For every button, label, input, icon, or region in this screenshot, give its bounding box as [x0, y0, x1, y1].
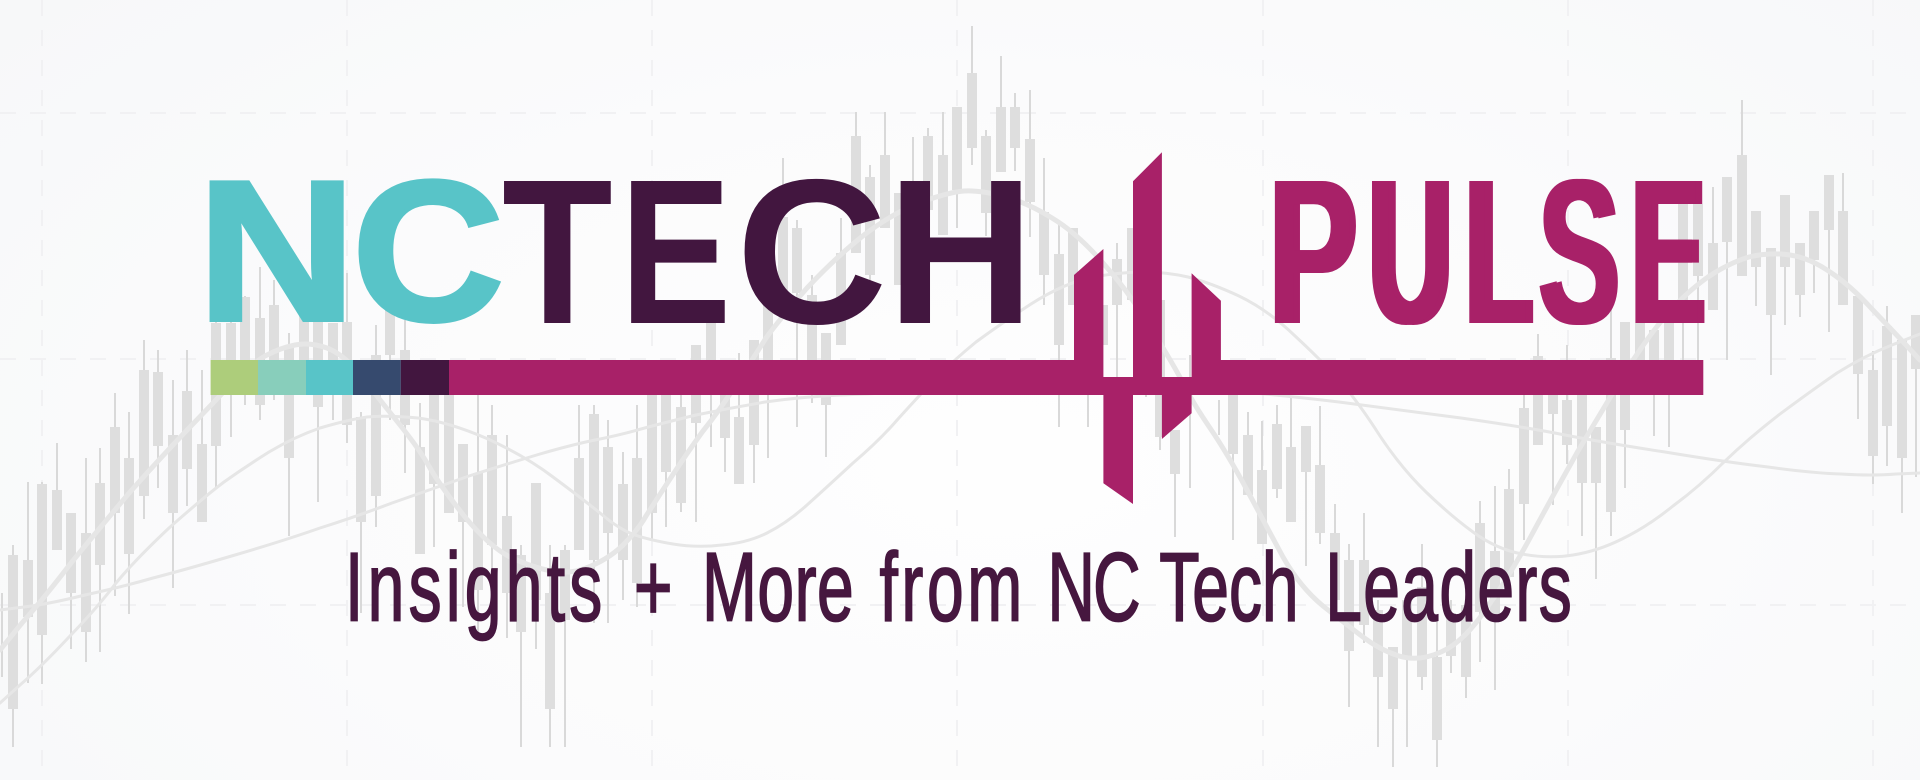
logo word: NC: N: [197, 140, 356, 363]
logo word: PULSE: S: [1536, 136, 1618, 367]
trend curves: [0, 191, 1920, 703]
tagline: Tech: [1159, 533, 1317, 642]
logo word: PULSE: [1266, 136, 1704, 367]
thin long-term curve: [0, 383, 1920, 610]
logo word: TECH: E: [620, 136, 731, 367]
tagline: NC: [1047, 533, 1155, 642]
logo word: TECH: T: [502, 136, 613, 367]
tagline: More: [702, 533, 873, 642]
tagline: from: [879, 533, 1048, 642]
logo word: PULSE: P: [1266, 136, 1354, 367]
logo word: PULSE: L: [1462, 136, 1529, 367]
logo word: PULSE: E: [1628, 136, 1702, 367]
logo word: TECH: H: [887, 136, 1034, 367]
pulse line with heartbeat spikes: [449, 152, 1703, 504]
tagline: Leaders: [1325, 533, 1573, 642]
logo word: TECH: C: [736, 136, 887, 367]
logo word: TECH: [502, 136, 1034, 367]
logo word: PULSE: U: [1364, 136, 1449, 367]
medium moving-average curve: [0, 272, 1920, 703]
colour swatch bar: [211, 360, 449, 395]
logo word: NC: C: [352, 140, 504, 363]
tagline: Insights: [345, 533, 629, 642]
tagline: +: [634, 533, 691, 642]
logo word: NC: [197, 140, 504, 363]
thick moving-average curve: [0, 191, 1920, 658]
